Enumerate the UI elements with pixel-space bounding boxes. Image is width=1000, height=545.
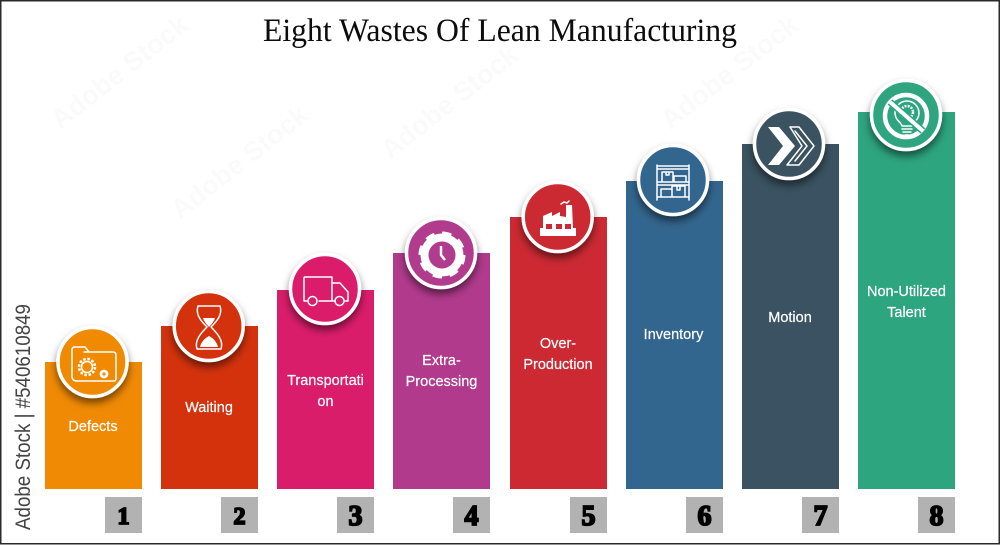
label: Waiting: Waiting <box>185 400 233 416</box>
icon: crossed out light bulb <box>872 80 940 150</box>
label: Over-Production: Production <box>523 357 593 373</box>
icon: double chevron <box>754 110 824 178</box>
number badge 6: 6 <box>698 501 712 532</box>
label: Inventory: Inventory <box>644 327 704 343</box>
label: Transportation: Transportati <box>287 373 364 389</box>
label: Transportation: on <box>317 394 334 410</box>
icon: truck <box>290 254 360 324</box>
panel: 5 Over-Production <box>510 182 607 489</box>
label: Over-Production: Over- <box>540 336 576 352</box>
panel: 1 Defects <box>45 328 142 489</box>
panel: 7 Motion <box>742 110 839 489</box>
number badge 8 <box>918 497 955 533</box>
number badge 1 <box>105 497 142 533</box>
number badge 4 <box>453 497 490 533</box>
icon: warehouse shelves <box>638 146 708 214</box>
icon: gear with clock <box>406 218 476 288</box>
icon: factory <box>523 182 592 252</box>
label: Extra-Processing: Extra- <box>422 353 461 369</box>
number badge 3 <box>337 497 374 533</box>
label: Extra-Processing: Processing <box>406 374 477 390</box>
panel: 3 Transportation <box>277 254 374 489</box>
number badge 1: 1 <box>118 504 130 530</box>
label: Non-Utilized Talent: Non-Utilized <box>867 284 946 300</box>
number badge 7 <box>802 497 839 533</box>
stock id side text: Adobe Stock | #540610849 <box>12 304 35 530</box>
number badge 4: 4 <box>464 501 478 532</box>
panel: 4 Extra-Processing <box>393 218 490 489</box>
label: Defects: Defects <box>68 419 118 435</box>
number badge 2 <box>221 497 258 533</box>
icon: folder with gears <box>58 328 127 396</box>
panel: 2 Waiting <box>161 292 258 489</box>
number badge 5 <box>570 497 607 533</box>
label: Non-Utilized Talent: Talent <box>887 305 926 321</box>
number badge 2: 2 <box>234 504 246 530</box>
label: Motion: Motion <box>768 310 812 326</box>
panel: 8 Non-Utilized Talent <box>858 80 955 489</box>
number badge 8: 8 <box>930 501 944 532</box>
number badge 5: 5 <box>582 501 596 532</box>
number badge 3: 3 <box>348 501 362 532</box>
number badge 6 <box>686 497 723 533</box>
title: Eight Wastes Of Lean Manufacturing <box>263 13 737 49</box>
number badge 7: 7 <box>814 501 828 532</box>
icon: hourglass <box>174 292 243 360</box>
panel: 6 Inventory <box>626 146 723 489</box>
